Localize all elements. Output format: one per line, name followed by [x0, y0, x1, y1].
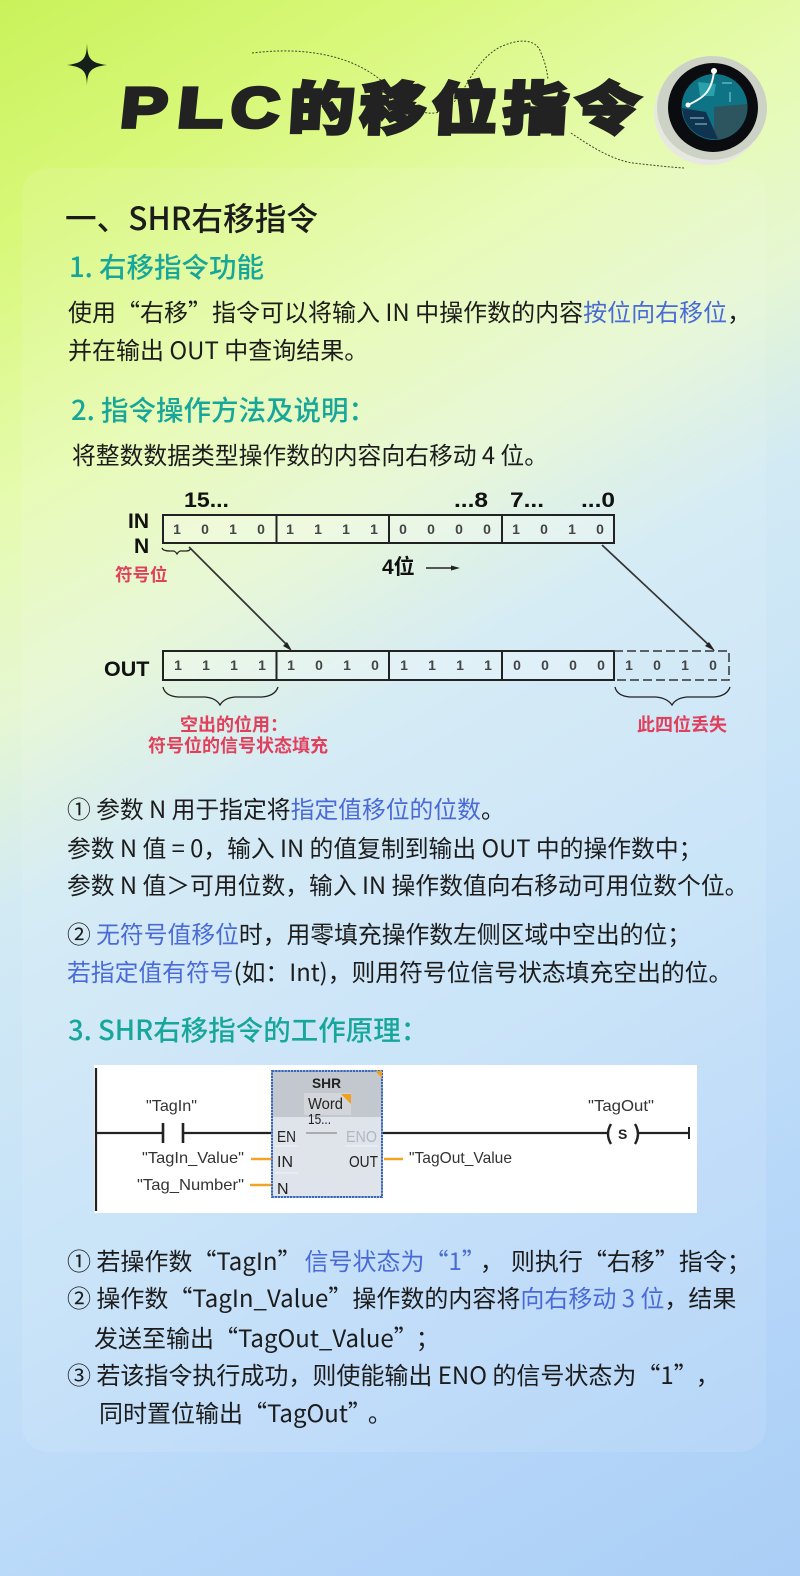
contact TagIn: "TagIn" [146, 1098, 197, 1115]
brace: vacated bits [163, 687, 278, 705]
OUT register: 0 [709, 657, 717, 673]
IN register: 0 [455, 521, 463, 537]
text: function description: 使用“右移”指令可以将输入 IN 中操作数的内容按位向右移位， [68, 293, 751, 328]
bit numbers: 7... [510, 489, 544, 512]
OUT register: 1 [484, 657, 492, 673]
text: operation summary: 将整数数据类型操作数的内容向右移动 4 位。 [72, 436, 548, 471]
panel: content card [22, 168, 766, 1452]
text: note one line 2: 参数 N 值 = 0，输入 IN 的值复制到输出 OUT 中的操作数中； [67, 829, 702, 864]
coil TagOut [588, 1098, 689, 1144]
title: P [118, 76, 171, 139]
arrow: low bits to discarded [602, 545, 715, 651]
SHR block: OUT [349, 1154, 378, 1171]
title: L [175, 76, 227, 139]
text: principle step 3: ③ 若该指令执行成功，则使能输出 ENO 的信号状态为“1” ， [67, 1356, 720, 1391]
OUT register: 1 [681, 657, 689, 673]
OUT register: 0 [597, 657, 605, 673]
IN register: 1 [229, 521, 237, 537]
coil TagOut: "TagOut" [588, 1098, 654, 1115]
SHR block: Word [308, 1096, 343, 1113]
input tags [137, 1150, 403, 1194]
IN register: 0 [427, 521, 435, 537]
text: note two line 2: 若指定值有符号(如：Int)，则用符号位信号状态填充空出的位。 [67, 953, 732, 988]
icon: circular circuit badge [654, 56, 767, 166]
output tag: "TagOut_Value [409, 1150, 512, 1167]
shift label: 4位 [382, 555, 415, 579]
input tags: "Tag_Number" [137, 1177, 244, 1194]
label: vacated bits: 空出的位用： [180, 714, 288, 735]
bit numbers: ...8 [454, 489, 488, 512]
IN register: 0 [399, 521, 407, 537]
label: vacated bits: 符号位的信号状态填充 [148, 735, 328, 756]
OUT register: 1 [202, 657, 210, 673]
text: principle step 1: ① 若操作数“TagIn”信号状态为“1”， 则执行“右移”指令； [67, 1242, 751, 1277]
IN register: 0 [257, 521, 265, 537]
OUT register: 0 [315, 657, 323, 673]
IN register: 1 [286, 521, 294, 537]
IN register: 0 [201, 521, 209, 537]
IN register: 0 [483, 521, 491, 537]
OUT register: 0 [541, 657, 549, 673]
heading: working principle: 3. SHR右移指令的工作原理： [68, 1008, 428, 1048]
OUT register: 1 [174, 657, 182, 673]
contact TagIn [146, 1098, 197, 1143]
shift label [382, 555, 460, 579]
diagram: bit shift [104, 489, 731, 756]
OUT register: 1 [428, 657, 436, 673]
SHR block: N [277, 1181, 289, 1198]
SHR block: EN [277, 1129, 296, 1146]
text: principle step 2: ② 操作数“TagIn_Value”操作数的内容将向右移动 3 位，结果 [67, 1279, 736, 1314]
OUT register: 1 [343, 657, 351, 673]
title: 的移位指令 [286, 64, 649, 146]
SHR block: IN [277, 1154, 293, 1171]
diagram: ladder logic [94, 1065, 697, 1213]
heading: section one: 一、SHR右移指令 [65, 194, 318, 240]
OUT register: 1 [258, 657, 266, 673]
bit numbers: ...0 [581, 489, 615, 512]
IN register: 1 [314, 521, 322, 537]
title: C [228, 76, 283, 139]
rung [96, 1132, 689, 1134]
SHR block [272, 1071, 382, 1198]
icon: four-point sparkle [67, 44, 107, 84]
heading: right shift function: 1. 右移指令功能 [69, 245, 264, 285]
IN register: 0 [540, 521, 548, 537]
IN label: IN [128, 510, 149, 533]
sign bit label: 符号位 [115, 565, 168, 585]
bit numbers [184, 489, 615, 512]
OUT register [163, 651, 729, 680]
text: note one line 3: 参数 N 值＞可用位数，输入 IN 操作数值向右移动可用位数个位。 [67, 866, 748, 901]
OUT register: 1 [230, 657, 238, 673]
label: lost bits: 此四位丢失 [637, 714, 727, 735]
text: principle step 3 line 2: 同时置位输出“TagOut” 。 [99, 1394, 392, 1429]
OUT register: 0 [569, 657, 577, 673]
sign bit brace [162, 548, 191, 554]
IN register: 1 [568, 521, 576, 537]
IN register: 1 [342, 521, 350, 537]
bit numbers: 15... [184, 489, 229, 512]
decorative dotted curves behind title [252, 40, 684, 168]
arrow: sign bit to out [189, 547, 292, 651]
IN register: 1 [370, 521, 378, 537]
text: note two: ② 无符号值移位时，用零填充操作数左侧区域中空出的位； [67, 915, 691, 950]
OUT register: 0 [653, 657, 661, 673]
SHR block: 15... [308, 1111, 331, 1128]
title [118, 64, 649, 146]
label: vacated bits [148, 714, 328, 756]
OUT register: 1 [456, 657, 464, 673]
OUT register: 1 [400, 657, 408, 673]
text: function description line 2: 并在输出 OUT 中查询结果。 [68, 331, 368, 366]
OUT register: 0 [513, 657, 521, 673]
IN register [163, 515, 614, 543]
IN register: 0 [596, 521, 604, 537]
OUT register: 1 [625, 657, 633, 673]
brace: lost bits [615, 687, 730, 705]
IN label [128, 510, 149, 558]
power rail [95, 1068, 97, 1211]
SHR block: SHR [312, 1075, 341, 1091]
heading: operation method: 2. 指令操作方法及说明： [71, 388, 376, 428]
IN register: 1 [173, 521, 181, 537]
coil TagOut: S [618, 1126, 627, 1142]
IN label: N [134, 535, 149, 558]
input tags: "TagIn_Value" [142, 1150, 244, 1167]
SHR block: ENO [346, 1129, 377, 1146]
OUT register: 1 [287, 657, 295, 673]
text: note one: ① 参数 N 用于指定将指定值移位的位数。 [67, 790, 505, 825]
OUT register: 0 [371, 657, 379, 673]
IN register: 1 [512, 521, 520, 537]
OUT label: OUT [104, 657, 149, 681]
text: principle step 2 line 2: 发送至输出“TagOut_Value” ； [94, 1319, 440, 1354]
